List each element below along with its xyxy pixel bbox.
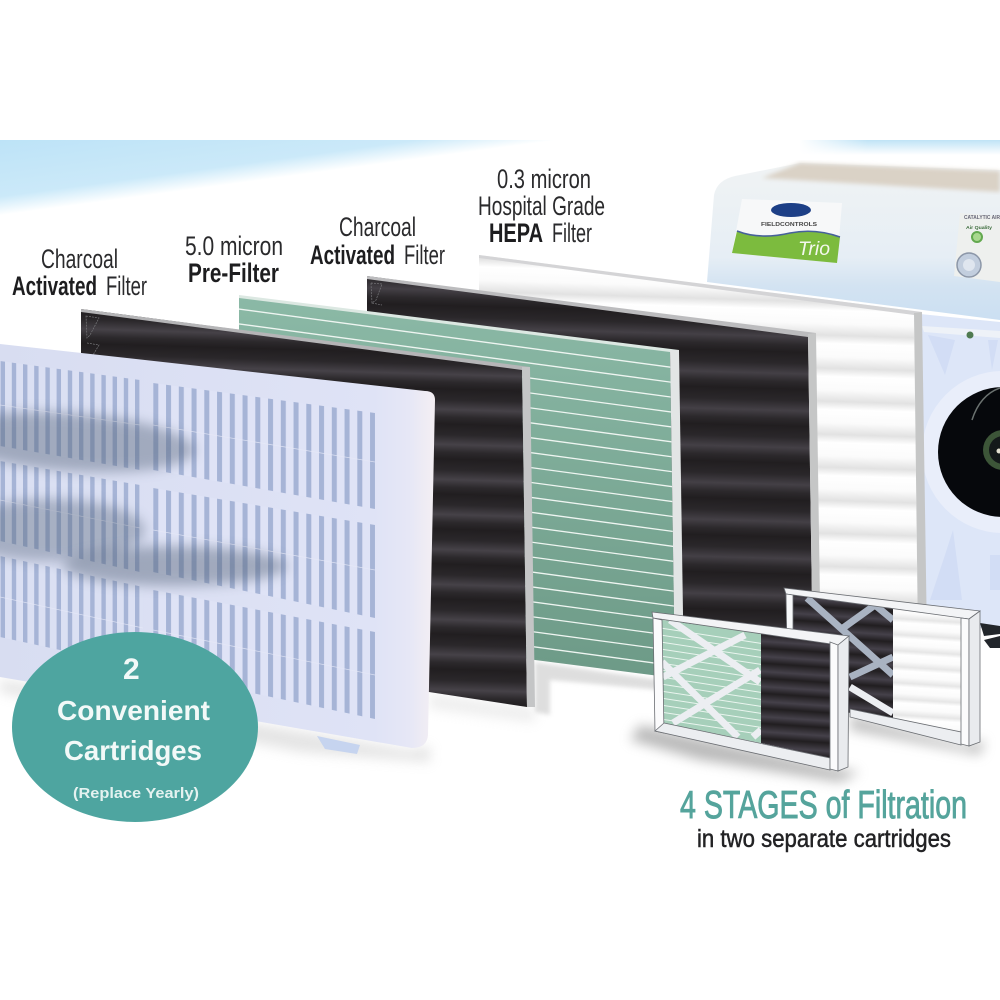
rear cartridge [784,588,980,746]
front cartridge pre-filter section [660,620,765,743]
label: charcoal activated filter (front) [12,244,147,301]
front cartridge [652,612,849,771]
label: 5.0 micron pre-filter [185,231,283,288]
rear cartridge charcoal section [793,595,893,718]
rear cartridge frame [784,588,980,746]
subheading: in two separate cartridges: in two separate cartridges [697,825,951,853]
label: charcoal activated filter (rear): Activated [310,240,395,270]
label: charcoal activated filter (front): Filter [106,271,147,301]
grille dark airflow shadows [0,404,287,586]
rear cartridge lattice [807,598,893,713]
label: charcoal activated filter (rear) [310,212,445,270]
label: charcoal activated filter (rear): Charcoal [339,212,416,242]
label: 0.3 micron hospital grade HEPA filter: 0.3 micron [497,164,591,194]
control panel: CATALYTIC AIR [964,215,1000,221]
callout oval: 2 convenient cartridges: Cartridges [64,735,202,766]
label: charcoal activated filter (front): Charcoal [41,244,118,274]
grille bottom tab [317,736,360,754]
grille slots left section [0,361,143,668]
label: charcoal activated filter (front): Activated [12,271,97,301]
callout oval: 2 convenient cartridges [12,632,258,822]
label: 0.3 micron hospital grade HEPA filter [478,164,605,248]
grille slots right section [153,383,375,719]
control panel: Air Quality [966,225,993,230]
label: 0.3 micron hospital grade HEPA filter: HEPA [489,218,543,248]
product label: Trio [798,239,830,260]
unit cream top [762,163,1000,192]
control panel [954,213,1000,282]
callout oval: 2 convenient cartridges: Convenient [57,695,210,726]
unit body [707,163,1000,320]
label: 5.0 micron pre-filter: Pre-Filter [188,258,279,288]
cartridge shadows [630,715,985,782]
panel: charcoal filter rear [367,276,821,670]
unit lower housing [920,314,1000,628]
label: 5.0 micron pre-filter: 5.0 micron [185,231,283,261]
soft shadow under filters [0,662,660,762]
panel: front intake grille [0,344,435,754]
label: charcoal activated filter (rear): Filter [404,240,445,270]
front cartridge frame [652,612,849,771]
callout oval: 2 convenient cartridges: (Replace Yearly) [73,785,199,802]
label: 0.3 micron hospital grade HEPA filter: Hospital Grade [478,191,605,221]
background sky gradient [0,140,1000,216]
panel: HEPA filter [479,255,927,640]
panel: charcoal filter front [81,309,535,707]
product label [732,199,842,263]
callout oval: 2 convenient cartridges: 2 [123,653,140,686]
front cartridge charcoal section [761,633,830,758]
fan assembly [922,326,1000,648]
air purifier unit [707,163,1000,648]
product label: FIELDCONTROLS [761,222,817,228]
rear cartridge HEPA section [893,608,961,732]
panel: green pre-filter [238,295,684,680]
label: 0.3 micron hospital grade HEPA filter: Filter [552,218,592,248]
